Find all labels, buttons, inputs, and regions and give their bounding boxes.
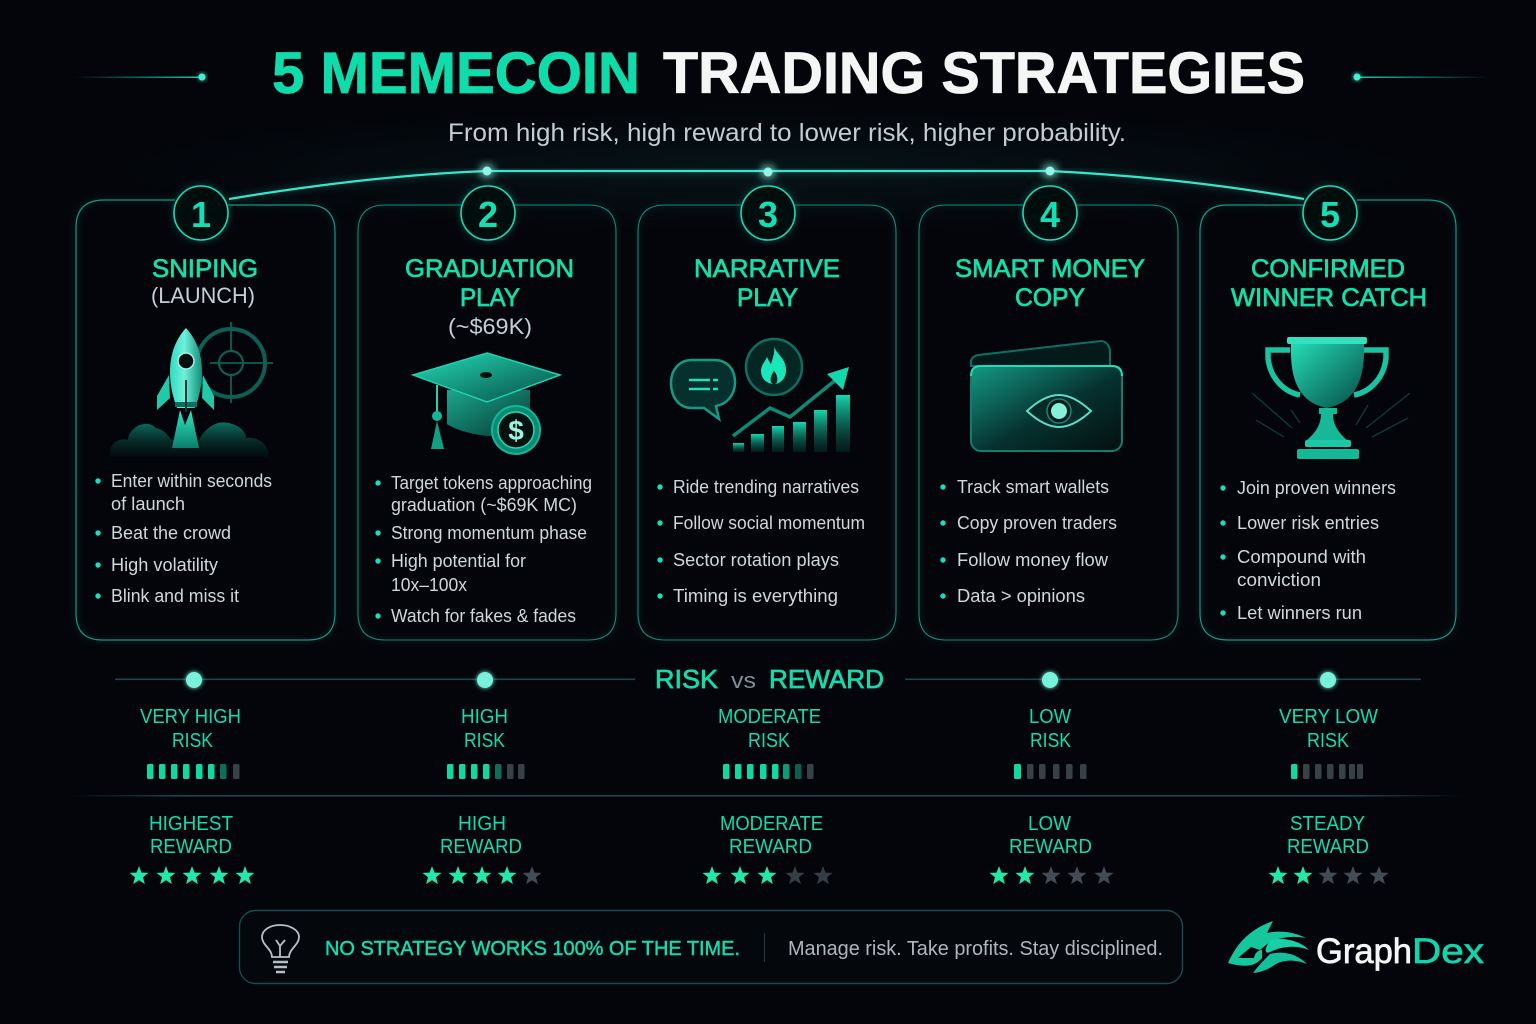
reward level: steady: [1268, 813, 1389, 884]
icon: light bulb: [262, 925, 299, 972]
bullet list: Copy proven traders: [957, 513, 1117, 533]
badge 2: 2: [478, 194, 498, 235]
reward level: low: REWARD: [1009, 836, 1092, 858]
risk level: very high: RISK: [172, 730, 214, 752]
logo: GraphDex: [1228, 921, 1485, 973]
badge 4: [1023, 186, 1077, 240]
heading: graduation play: PLAY: [460, 284, 520, 312]
risk timeline: [115, 672, 1421, 688]
reward level: highest: HIGHEST: [149, 813, 233, 835]
reward level: low: [989, 813, 1114, 884]
bullet list: [940, 477, 1117, 606]
bullet list: of launch: [111, 494, 185, 514]
reward level: moderate: [702, 813, 833, 884]
heading: confirmed winner catch: WINNER CATCH: [1231, 284, 1427, 312]
bullet list: Follow social momentum: [673, 513, 865, 533]
bullet list: Let winners run: [1237, 603, 1362, 623]
risk level: high: HIGH: [461, 706, 508, 728]
bullet list: Compound with: [1237, 547, 1366, 567]
bullet list: Join proven winners: [1237, 478, 1396, 498]
badge 3: 3: [758, 194, 778, 235]
heading: graduation play: (~$69K): [448, 314, 532, 339]
badge 4: 4: [1040, 194, 1060, 235]
icon: chat bubble, flame and rising chart: [671, 339, 850, 452]
bullet list: Lower risk entries: [1237, 513, 1379, 533]
icon: rocket and target: [110, 322, 273, 457]
subtitle: From high risk, high reward to lower risk, higher probability.: [448, 119, 1126, 147]
bullet list: [1220, 478, 1396, 623]
heading: confirmed winner catch: [1231, 255, 1427, 312]
risk level: high: [447, 706, 524, 779]
reward level: high: [422, 813, 542, 884]
heading: risk vs reward: vs: [731, 668, 756, 693]
heading: graduation play: GRADUATION: [405, 255, 574, 283]
title accent left: [75, 74, 206, 80]
bullet list: Target tokens approaching: [391, 473, 592, 493]
reward level: moderate: MODERATE: [720, 813, 823, 835]
risk level: very high: [140, 706, 241, 779]
reward level: steady: STEADY: [1290, 813, 1365, 835]
bullet list: Watch for fakes & fades: [391, 606, 576, 626]
badge 3: [741, 186, 795, 240]
risk level: very high: VERY HIGH: [140, 706, 241, 728]
bullet list: Enter within seconds: [111, 471, 272, 491]
bullet list: [375, 473, 592, 626]
logo: GraphDex: Graph: [1316, 932, 1412, 971]
panel: strategy 2 graduation play: [358, 186, 616, 640]
callout: disclaimer: Manage risk. Take profits. Stay disciplined.: [788, 938, 1163, 960]
heading: narrative play: NARRATIVE: [694, 255, 840, 283]
icon: wallet with eye: [971, 341, 1122, 451]
title: [272, 41, 1305, 106]
risk level: moderate: MODERATE: [718, 706, 821, 728]
bullet list: [95, 471, 272, 606]
bullet list: conviction: [1237, 570, 1321, 590]
risk level: low: LOW: [1029, 706, 1071, 728]
bullet list: Follow money flow: [957, 550, 1109, 570]
heading: sniping: SNIPING: [152, 255, 258, 283]
icon: graduation cap with dollar coin: [413, 353, 560, 454]
heading: narrative play: [694, 255, 840, 312]
reward level: highest: REWARD: [150, 836, 232, 858]
bullet list: High potential for: [391, 551, 526, 571]
panel: strategy 3 narrative play: [638, 186, 896, 640]
risk level: low: [1014, 706, 1086, 779]
bullet list: Timing is everything: [673, 586, 838, 606]
connecting progress line: [229, 166, 1304, 199]
badge 2: [461, 186, 515, 240]
bullet list: [657, 477, 865, 606]
bullet list: graduation (~$69K MC): [391, 495, 577, 515]
badge 1: 1: [191, 194, 211, 235]
bullet list: High volatility: [111, 555, 218, 575]
bullet list: Strong momentum phase: [391, 523, 587, 543]
icon: graduation cap with dollar coin: $: [508, 415, 524, 446]
risk level: moderate: RISK: [748, 730, 791, 752]
title: TRADING STRATEGIES: [663, 41, 1305, 106]
heading: smart money copy: SMART MONEY: [955, 255, 1145, 283]
reward level: high: HIGH: [458, 813, 506, 835]
reward level: steady: REWARD: [1287, 836, 1369, 858]
title accent right: [1354, 74, 1489, 80]
heading: sniping: (LAUNCH): [151, 283, 255, 308]
badge 5: [1303, 186, 1357, 240]
risk level: moderate: [718, 706, 821, 779]
bullet list: Blink and miss it: [111, 586, 239, 606]
heading: smart money copy: [955, 255, 1145, 312]
bullet list: Track smart wallets: [957, 477, 1109, 497]
reward level: moderate: REWARD: [729, 836, 812, 858]
reward level: low: LOW: [1028, 813, 1071, 835]
heading: sniping: [151, 255, 258, 308]
heading: risk vs reward: REWARD: [769, 664, 884, 694]
badge 5: 5: [1320, 194, 1340, 235]
bullet list: 10x–100x: [391, 575, 467, 595]
bullet list: Data > opinions: [957, 586, 1085, 606]
heading: smart money copy: COPY: [1015, 284, 1085, 312]
heading: confirmed winner catch: CONFIRMED: [1251, 255, 1405, 283]
callout: disclaimer: [240, 910, 1182, 984]
bullet list: Ride trending narratives: [673, 477, 859, 497]
heading: graduation play: [405, 255, 574, 339]
title: 5 MEMECOIN: [272, 41, 640, 106]
panel: strategy 1 sniping: [76, 186, 335, 640]
reward level: highest: [129, 813, 255, 884]
icon: trophy: [1252, 337, 1410, 459]
heading: narrative play: PLAY: [737, 284, 798, 312]
heading: risk vs reward: [655, 664, 884, 694]
bullet list: Beat the crowd: [111, 523, 231, 543]
risk level: high: RISK: [464, 730, 506, 752]
badge 1: [174, 186, 228, 240]
reward level: high: REWARD: [440, 836, 522, 858]
heading: risk vs reward: RISK: [655, 664, 719, 694]
risk level: very low: VERY LOW: [1279, 706, 1378, 728]
callout: disclaimer: NO STRATEGY WORKS 100% OF THE TIME.: [325, 938, 740, 960]
logo: GraphDex: Dex: [1412, 932, 1485, 971]
panel: strategy 4 smart money copy: [919, 186, 1178, 640]
risk level: very low: RISK: [1307, 730, 1350, 752]
panel: strategy 5 confirmed winner catch: [1200, 186, 1456, 640]
bullet list: Sector rotation plays: [673, 550, 839, 570]
risk level: very low: [1279, 706, 1378, 779]
risk level: low: RISK: [1030, 730, 1072, 752]
